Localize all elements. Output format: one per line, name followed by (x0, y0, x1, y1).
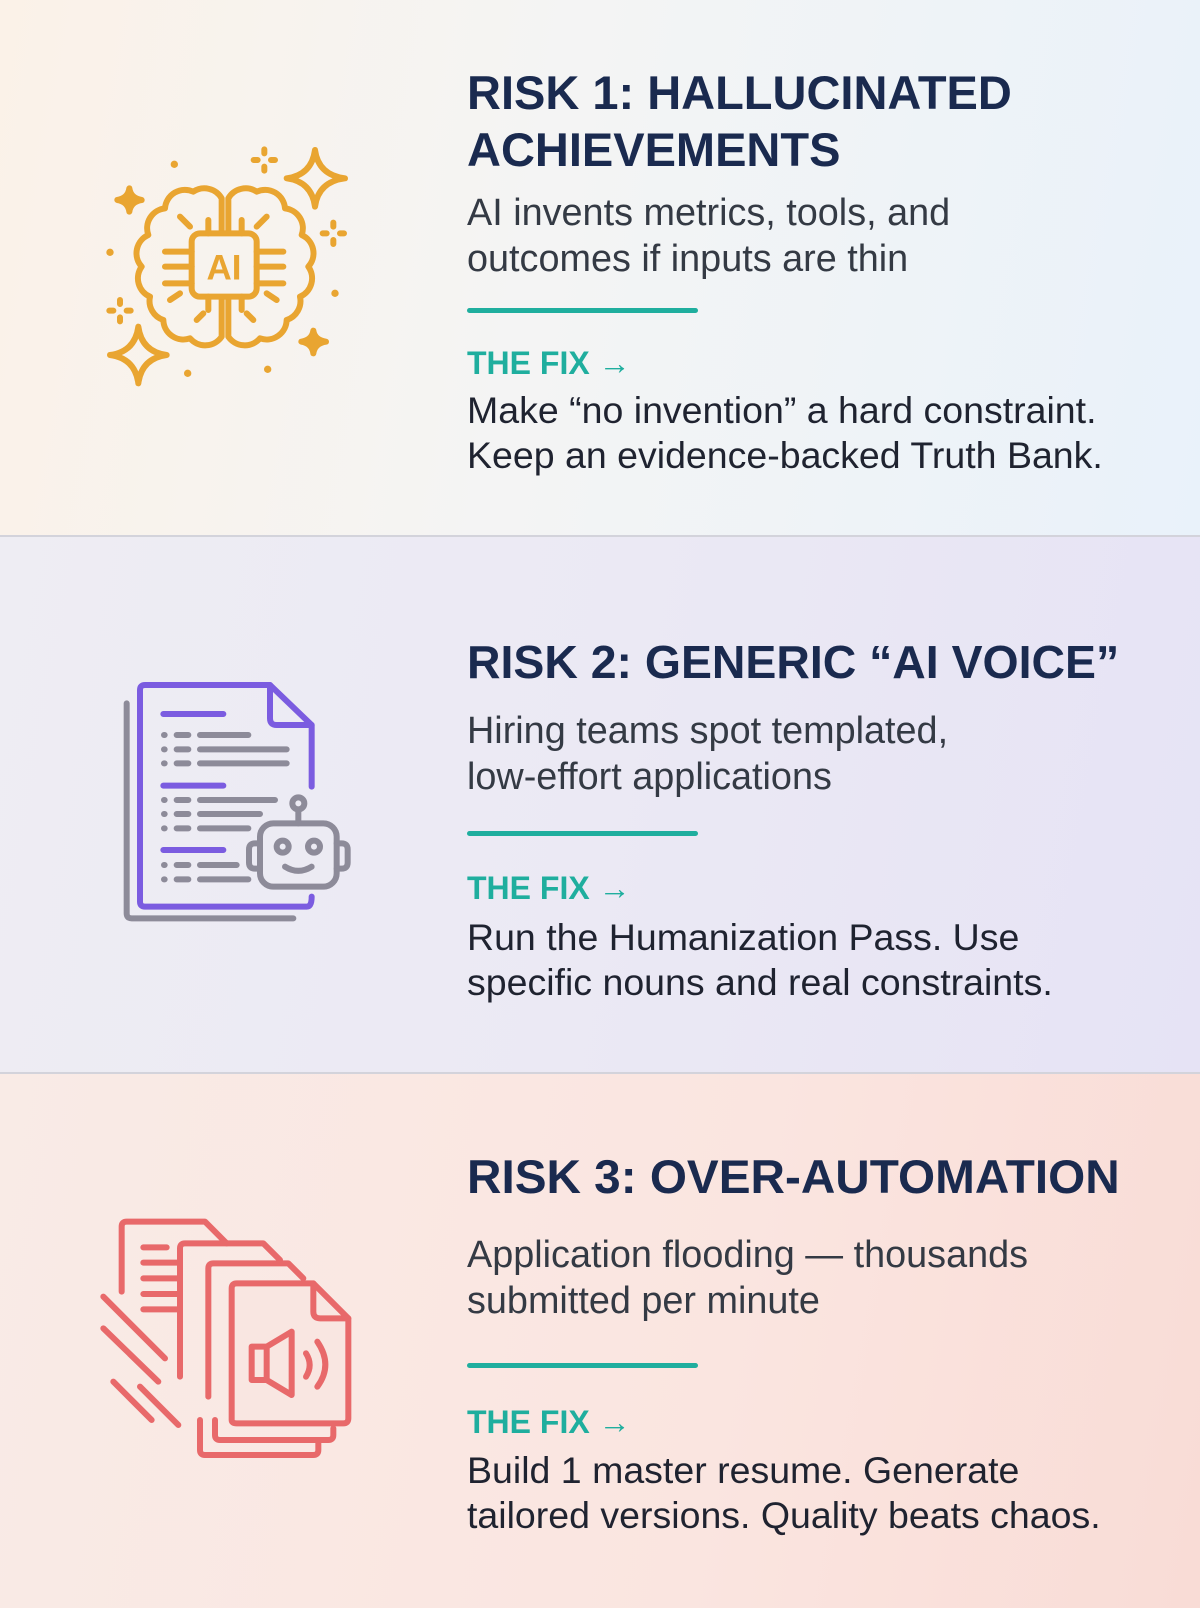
heading: risk 1: ACHIEVEMENTS (467, 123, 840, 176)
label: the fix 3: THE FIX → (467, 1404, 631, 1440)
heading: risk 3: RISK 3: OVER-AUTOMATION (467, 1151, 1120, 1204)
text: fix 2 (467, 916, 1053, 1003)
text: risk 2 description: Hiring teams spot templated, (467, 710, 948, 752)
text: risk 1 description: AI invents metrics, tools, and (467, 192, 950, 234)
text: fix 2: specific nouns and real constraints. (467, 961, 1053, 1003)
text: fix 1: Make “no invention” a hard constraint. (467, 389, 1096, 431)
panel: risk 2 (0, 535, 1200, 1072)
label: the fix 1: THE FIX → (467, 345, 631, 381)
text: risk 3 description: Application flooding — thousands (467, 1234, 1028, 1276)
text: fix 3: tailored versions. Quality beats chaos. (467, 1494, 1101, 1536)
text: risk 2 description (467, 710, 948, 798)
label: the fix 2: THE FIX → (467, 870, 631, 906)
icon: AI brain with sparkles: AI (206, 248, 242, 287)
heading: risk 1 (467, 66, 1012, 176)
icon: AI brain with sparkles (106, 146, 348, 386)
heading: risk 1: RISK 1: HALLUCINATED (467, 66, 1012, 119)
icon: document with robot (124, 682, 351, 922)
text: risk 2 description: low-effort applications (467, 756, 832, 798)
panel: risk 1 (0, 0, 1200, 535)
text: fix 3 (467, 1449, 1101, 1536)
text: risk 1 description (467, 192, 950, 280)
text: fix 1 (467, 389, 1103, 476)
text: fix 1: Keep an evidence-backed Truth Bank. (467, 434, 1103, 476)
text: risk 3 description (467, 1234, 1028, 1322)
panel: risk 3 (0, 1072, 1200, 1608)
heading: risk 2: RISK 2: GENERIC “AI VOICE” (467, 636, 1119, 688)
text: risk 3 description: submitted per minute (467, 1280, 820, 1322)
icon: stacked files flooding (100, 1218, 352, 1458)
text: risk 1 description: outcomes if inputs are thin (467, 238, 908, 280)
text: fix 2: Run the Humanization Pass. Use (467, 916, 1019, 958)
text: fix 3: Build 1 master resume. Generate (467, 1449, 1019, 1491)
